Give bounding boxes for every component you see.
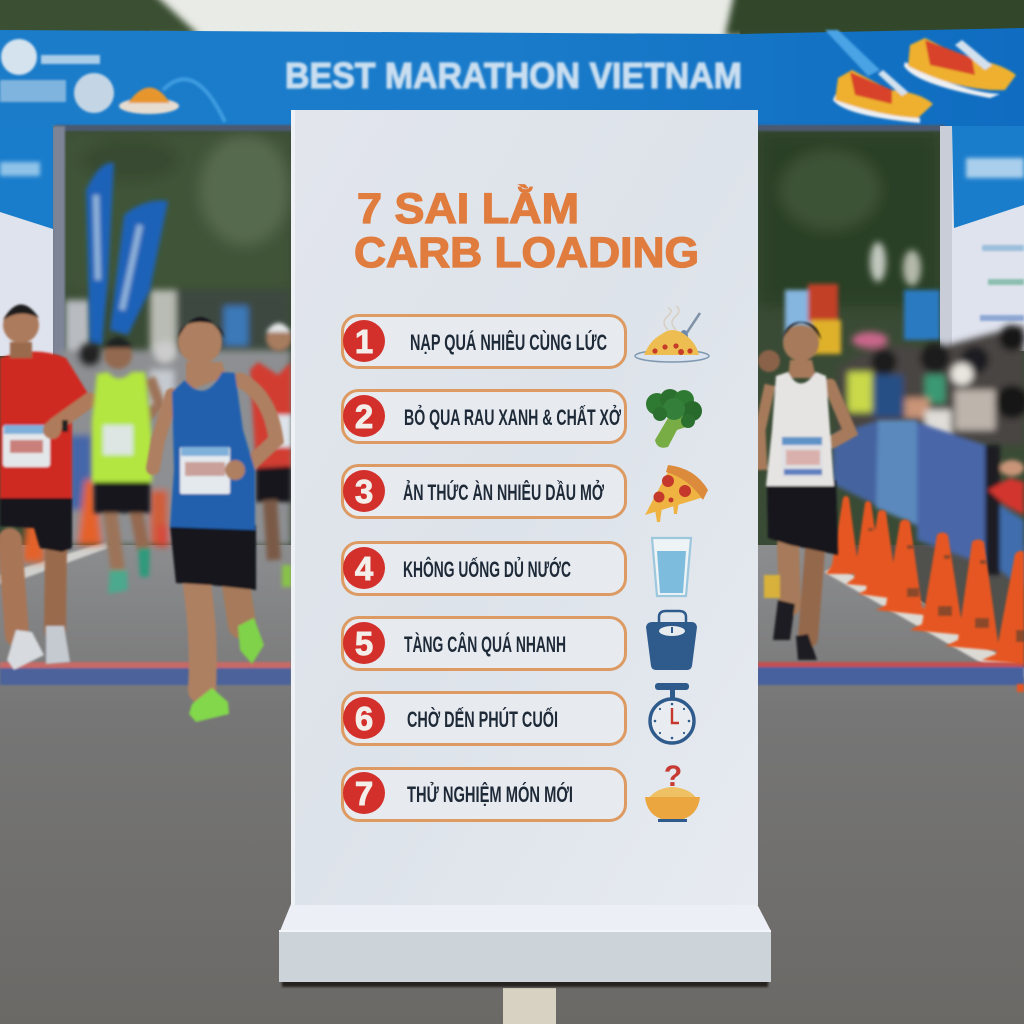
row 5: tăng cân quá nhanh (342, 618, 626, 670)
runner: blue vest center-left (153, 317, 276, 722)
runner: red shirt, far left (0, 304, 92, 670)
row 7: thử nghiệm món mới: THỬ NGHIỆM MÓN MỚI (407, 782, 573, 807)
icon: mystery bowl: ? (664, 760, 682, 793)
left arch pillar (0, 126, 65, 356)
row 2: bỏ qua rau xanh: 2 (355, 398, 373, 435)
road surface (0, 541, 1024, 1024)
background: sky and trees (0, 0, 1024, 560)
sign base shadow (282, 980, 768, 987)
banner dish icon (119, 79, 225, 122)
row 1: nạp quá nhiều: 1 (355, 323, 373, 360)
row 4: không uống đủ nước: KHÔNG UỐNG DỦ NƯỚC (403, 556, 571, 582)
row 3: ăn thức ăn nhiều dầu mỡ: ẢN THỨC ÀN NHIÊU DẦU MỞ (403, 480, 605, 505)
runner: white vest right (758, 322, 850, 660)
row 7: thử nghiệm món mới (342, 768, 626, 820)
row 6: chờ đến phút cuối (342, 692, 626, 744)
row 2: bỏ qua rau xanh: BỎ QUA RAU XANH & CHẤT XỞ (404, 405, 621, 430)
left sponsor logos (0, 39, 114, 113)
title: CARB LOADING (354, 229, 699, 277)
runner: red vest behind (250, 323, 292, 587)
runner: neon yellow vest (92, 337, 160, 594)
sign base (279, 904, 771, 982)
icon: stopwatch (650, 683, 694, 743)
row 5: tăng cân quá nhanh: 5 (355, 625, 373, 662)
finish arch banner (0, 28, 1024, 131)
finish line (0, 662, 1024, 685)
running shoes (825, 30, 1016, 123)
icon: weighing scale (646, 611, 697, 670)
row 7: thử nghiệm món mới: 7 (355, 775, 373, 812)
title: 7 SAI LẰM (357, 185, 579, 233)
row 3: ăn thức ăn nhiều dầu mỡ (342, 466, 626, 518)
row 4: không uống đủ nước (342, 542, 626, 594)
left background crowd and barrier (22, 341, 291, 562)
flags (86, 163, 940, 354)
icon: glass of water (652, 538, 691, 596)
icon: pasta plate (635, 306, 709, 362)
traffic cones (826, 496, 1024, 692)
sign board panel (291, 110, 758, 905)
row 1: nạp quá nhiều: NẠP QUÁ NHIÊU CÙNG LỨC (410, 330, 607, 355)
lane marking (503, 988, 556, 1024)
banner headline: BEST MARATHON VIETNAM (285, 55, 742, 96)
row 4: không uống đủ nước: 4 (355, 550, 374, 587)
icon: broccoli (646, 389, 702, 448)
row 5: tăng cân quá nhanh: TÀNG CÂN QUÁ NHANH (404, 632, 566, 657)
right arch pillar (940, 126, 1024, 351)
row 3: ăn thức ăn nhiều dầu mỡ: 3 (355, 473, 373, 510)
row 1: nạp quá nhiều (342, 316, 626, 368)
icon: mystery bowl (645, 760, 700, 822)
right spectators and barrier (833, 325, 1024, 590)
icon: pizza slice (645, 465, 708, 522)
row 6: chờ đến phút cuối: CHỜ DẾN PHÚT CUỐI (407, 706, 558, 732)
row 2: bỏ qua rau xanh (342, 390, 626, 442)
row 6: chờ đến phút cuối: 6 (355, 700, 373, 737)
title (354, 185, 699, 277)
